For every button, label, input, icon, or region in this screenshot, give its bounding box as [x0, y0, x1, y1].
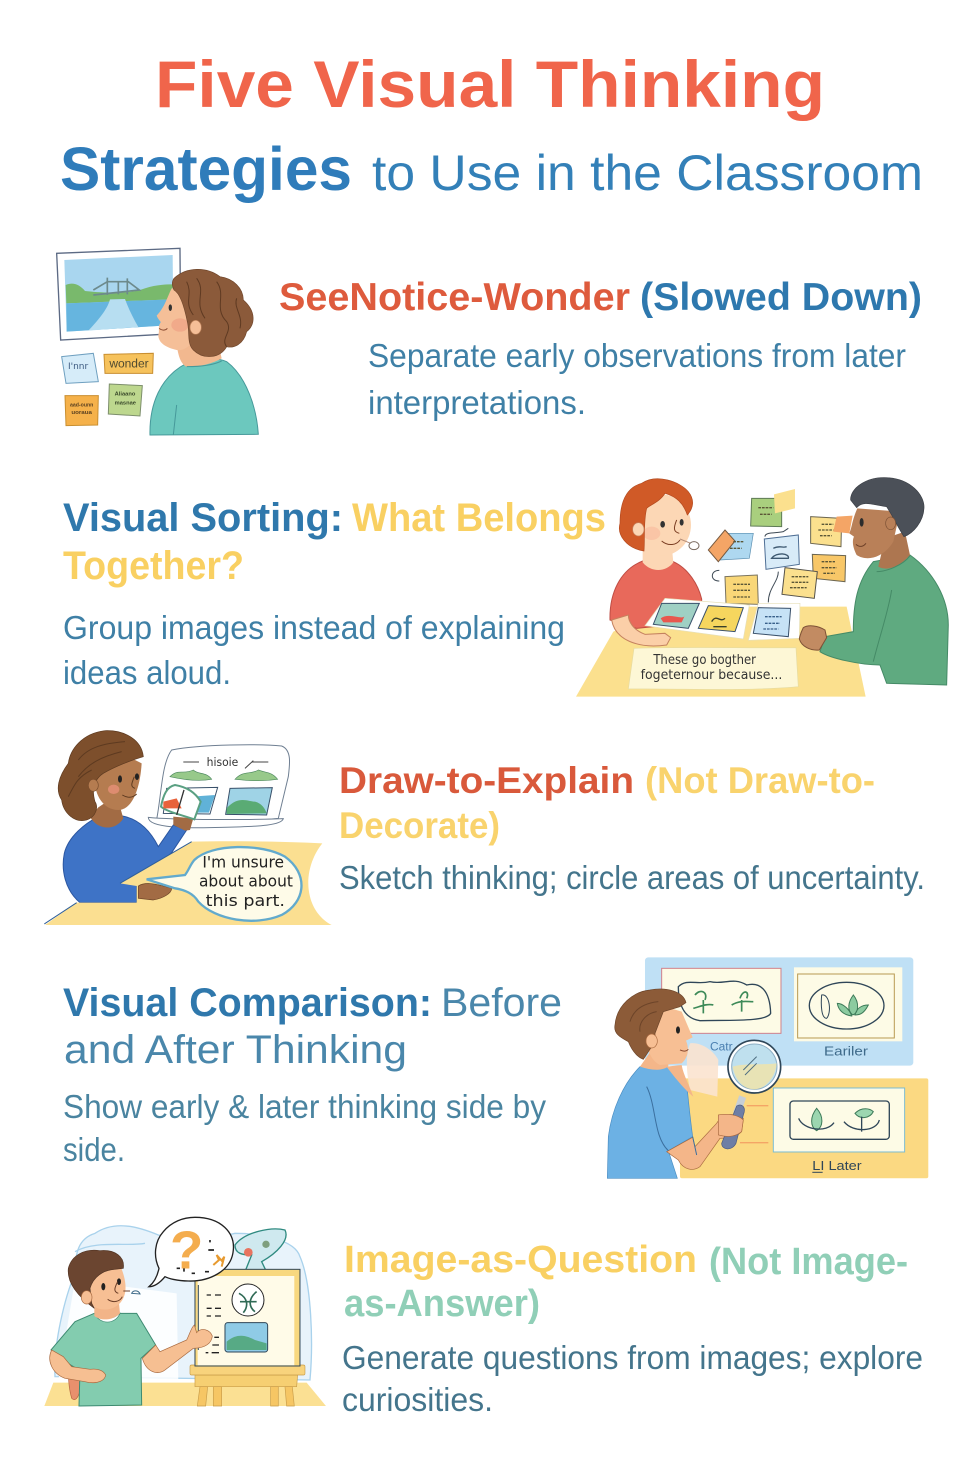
person	[58, 731, 201, 903]
section 3: Draw-to-Explain	[44, 731, 925, 925]
heading	[63, 496, 606, 588]
earlier sketch card: Eariler	[824, 1044, 868, 1058]
body text: Show early & later thinking side by	[63, 1088, 546, 1125]
heading: Before	[441, 981, 562, 1025]
body text	[63, 609, 565, 691]
caption card: fogeternour because...	[641, 668, 782, 683]
sticky note: orange: aad-ounn	[70, 403, 94, 409]
illustration: viewer looking at picture with sticky notes	[57, 248, 258, 435]
heading: Draw-to-Explain	[339, 760, 634, 801]
person	[607, 989, 743, 1178]
heading: What Belongs	[352, 496, 606, 540]
illustration: person comparing sketches with magnifier	[607, 957, 928, 1178]
section 4: Visual Comparison	[63, 957, 928, 1178]
title line 2: to Use in the Classroom	[372, 145, 923, 201]
early sketch card: Catr	[710, 1040, 733, 1054]
later sketch card	[773, 1088, 905, 1173]
orange dashes	[740, 1106, 768, 1143]
floor	[44, 1383, 326, 1406]
easel	[190, 1269, 305, 1406]
body text: curiosities.	[342, 1381, 493, 1418]
speech bubble	[147, 847, 301, 921]
heading	[344, 1239, 908, 1325]
speech bubble: about about	[199, 872, 293, 891]
heading: and After Thinking	[64, 1028, 407, 1072]
heading: SeeNotice-Wonder	[279, 276, 630, 319]
sticky note: blue	[62, 353, 98, 383]
heading	[279, 276, 922, 319]
person seen from behind	[150, 269, 258, 435]
cloud backdrop	[55, 1226, 311, 1380]
sticky note: green: Aliaano	[115, 392, 136, 398]
body text: Group images instead of explaining	[63, 609, 565, 646]
thought bubble with question mark: ?	[170, 1221, 203, 1280]
section 1: See-Notice-Wonder	[57, 248, 922, 435]
title	[60, 47, 923, 203]
sketch board: hisoie	[207, 755, 238, 769]
section 2: Visual Sorting	[63, 478, 948, 697]
heading: as-Answer)	[344, 1283, 540, 1325]
heading: (Not Image-	[709, 1241, 908, 1283]
desk edge	[44, 842, 192, 924]
paper in hand	[687, 1043, 718, 1097]
heading: Visual Sorting:	[63, 496, 343, 540]
title line 2	[60, 135, 923, 203]
thought bubble with question mark	[149, 1217, 233, 1287]
magnifier	[718, 1040, 781, 1149]
sticky note: blue: I'nnr	[68, 362, 89, 372]
later sketch card: LI Later	[812, 1159, 862, 1173]
sketch board	[148, 745, 290, 828]
heading: Together?	[63, 544, 244, 588]
title line 2: Strategies	[60, 135, 352, 203]
desk	[45, 841, 332, 925]
left child	[610, 479, 702, 646]
floating notes	[708, 489, 853, 604]
table	[576, 607, 866, 697]
body text: side.	[63, 1131, 125, 1168]
body text: interpretations.	[368, 384, 586, 421]
body text	[63, 1088, 546, 1168]
body text: Generate questions from images; explore	[342, 1339, 923, 1376]
sticky note: green: masnae	[115, 401, 136, 407]
heading: Image-as-Question	[344, 1239, 697, 1281]
speech bubble: I'm unsure	[202, 853, 284, 872]
body text	[342, 1339, 923, 1418]
heading: (Not Draw-to-	[645, 760, 875, 801]
illustration: student presenting at easel	[44, 1217, 326, 1406]
second speech bubble	[235, 1229, 286, 1270]
framed photo	[57, 248, 181, 340]
sticky note: orange	[65, 396, 98, 426]
title line 1: Five Visual Thinking	[155, 47, 825, 121]
body text: Sketch thinking; circle areas of uncertainty.	[339, 859, 925, 896]
blue panel	[645, 957, 913, 1066]
earlier sketch card	[794, 967, 902, 1058]
early sketch card	[662, 968, 781, 1054]
section 5: Image-as-Question	[44, 1217, 923, 1418]
caption card	[628, 648, 798, 689]
body text: ideas aloud.	[63, 654, 231, 691]
right person	[799, 478, 948, 685]
heading: Decorate)	[339, 805, 500, 846]
caption card: These go bogther	[652, 653, 757, 668]
sticky note: orange: uoraua	[71, 410, 93, 416]
heading	[339, 760, 875, 846]
illustration: student with sketch and speech bubble	[44, 731, 332, 925]
heading: Visual Comparison:	[63, 981, 432, 1025]
cards tray	[645, 598, 800, 640]
speech bubble: this part.	[206, 891, 285, 910]
sticky note: wonder: wonder	[108, 356, 149, 370]
hand	[138, 883, 172, 900]
yellow panel	[680, 1078, 928, 1178]
body text: Separate early observations from later	[368, 337, 906, 374]
illustration: two people sorting cards	[576, 478, 948, 697]
heading: (Slowed Down)	[640, 276, 922, 319]
sticky note: wonder	[104, 353, 153, 373]
heading	[63, 981, 562, 1072]
sticky note: green	[108, 384, 142, 416]
boy	[50, 1250, 212, 1406]
body text	[368, 337, 906, 421]
